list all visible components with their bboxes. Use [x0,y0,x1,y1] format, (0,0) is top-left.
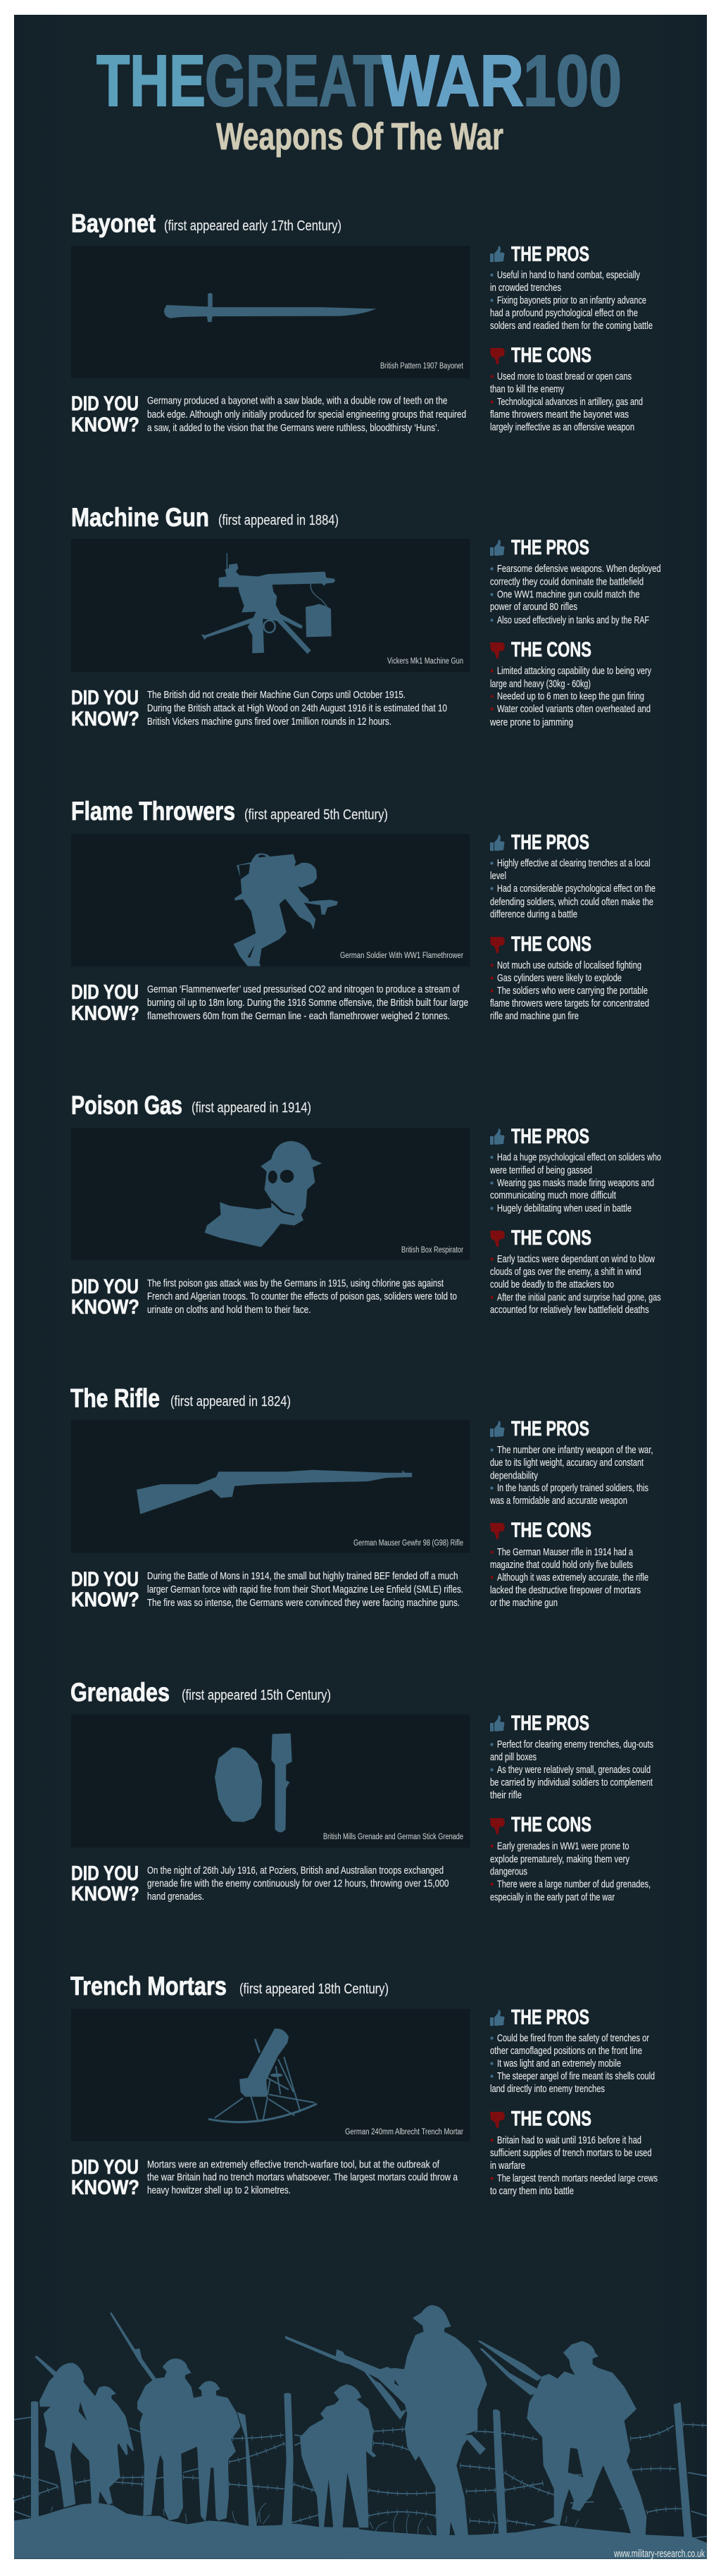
icon: flame thrower soldier silhouette [234,853,338,966]
did you know: machine gun [71,687,447,730]
pros: grenades: and pill boxes [490,1751,537,1763]
pros: bayonet: solders and readied them for the coming battle [490,320,653,332]
fence posts [31,2393,692,2538]
cons: grenades: THE CONS [511,1813,591,1836]
cons: flame throwers: The soldiers who were carrying the portable [497,985,648,997]
heading: grenades: (first appeared 15th Century) [182,1687,331,1703]
cons: the rifle: lacked the destructive firepower of mortars [490,1584,641,1596]
pros: grenades [490,1712,653,1801]
caption: German Mauser Gewhr 98 (G98) Rifle [353,1539,463,1548]
icon: trench mortar silhouette [208,2029,317,2122]
did you know: poison gas: French and Algerian troops. To counter the effects of poison gas, soliders were told to [147,1290,457,1302]
pros: machine gun: correctly they could dominate the battlefield [490,576,644,588]
pros: bayonet: Fixing bayonets prior to an infantry advance [497,294,646,306]
icon: rifle silhouette [137,1470,412,1514]
did you know: trench mortars: DID YOU [71,2156,139,2179]
heading: the rifle: (first appeared in 1824) [170,1393,291,1410]
cons: machine gun: Water cooled variants often overheated and [497,703,651,715]
panel: the rifle [70,1383,653,1612]
pros: machine gun: power of around 80 rifles [490,601,577,613]
cons: grenades [490,1813,651,1903]
cons: grenades: especially in the early part of the war [490,1891,615,1903]
panel: machine gun [71,503,661,730]
pros: bayonet: had a profound psychological effect on the [490,307,638,319]
title: THE [96,40,206,121]
cons: trench mortars [490,2108,658,2197]
heading: flame throwers: (first appeared 5th Century) [244,807,388,823]
heading: bayonet: Bayonet [71,209,156,238]
image panel: rifle [71,1420,470,1553]
heading: poison gas: Poison Gas [71,1091,182,1120]
heading: bayonet [71,209,341,238]
title: WAR [382,40,524,121]
pros: the rifle: The number one infantry weapon of the war, [497,1444,653,1456]
did you know: poison gas: KNOW? [71,1296,139,1319]
did you know: the rifle: During the Battle of Mons in 1914, the small but highly trained BEF fended off a much [147,1570,458,1582]
pros: grenades: be carried by individual soldiers to complement [490,1777,653,1788]
panel: flame throwers [71,797,656,1025]
pros: the rifle: was a formidable and accurate weapon [489,1495,627,1507]
pros: trench mortars: other camoflaged positions on the front line [490,2045,642,2057]
cons: flame throwers: Not much use outside of localised fighting [497,959,641,971]
pros: poison gas: Wearing gas masks made firing weapons and [497,1177,654,1189]
cons: grenades: There were a large number of dud grenades, [497,1878,651,1891]
caption: British Box Respirator [401,1246,463,1255]
cons: machine gun: Limited attacking capability due to being very [497,665,651,677]
soldiers [35,2305,646,2537]
did you know: the rifle [71,1568,463,1612]
heading: grenades: Grenades [70,1678,170,1707]
heading: machine gun: Machine Gun [71,503,209,532]
pros: flame throwers: difference during a battle [490,909,577,920]
pros: machine gun: One WW1 machine gun could match the [497,589,639,600]
caption: German Soldier With WW1 Flamethrower [340,952,463,960]
did you know: poison gas [71,1276,457,1319]
cons: machine gun [489,638,651,728]
pros: machine gun: Also used effectively in tanks and by the RAF [497,614,649,626]
pros: poison gas: THE PROS [511,1125,589,1148]
illustration: soldiers silhouette with barbed wire [14,2305,707,2559]
pros: flame throwers: defending soldiers, which could often make the [490,896,653,908]
cons: trench mortars: to carry them into battle [490,2185,574,2197]
heading: flame throwers: Flame Throwers [71,797,235,826]
did you know: grenades: DID YOU [71,1862,139,1885]
did you know: machine gun: KNOW? [71,708,139,730]
cons: the rifle: THE CONS [511,1519,591,1542]
pros: machine gun: THE PROS [511,536,589,559]
panel: bayonet [71,209,653,437]
did you know: machine gun: DID YOU [71,687,139,709]
cons: bayonet: Technological advances in artillery, gas and [497,396,643,408]
icon: grenades silhouette [215,1734,292,1832]
did you know: flame throwers: burning oil up to 18m long. During the 1916 Somme offensive, the British built four large [147,997,468,1009]
caption: British Mills Grenade and German Stick Grenade [323,1833,463,1841]
pros: grenades: THE PROS [511,1712,589,1735]
cons: poison gas: accounted for relatively few battlefield deaths [490,1304,649,1316]
pros: the rifle: In the hands of properly trained soldiers, this [497,1482,648,1494]
pros: trench mortars: The steeper angel of fire meant its shells could [497,2070,655,2082]
did you know: poison gas: urinate on cloths and hold them to their face. [147,1304,311,1316]
heading: machine gun [71,503,339,532]
did you know: trench mortars: Mortars were an extremely effective trench-warfare tool, but at the outbreak of [147,2158,440,2171]
cons: bayonet [490,344,643,433]
did you know: trench mortars [71,2156,458,2199]
did you know: flame throwers: KNOW? [71,1002,139,1025]
pros: flame throwers [490,831,656,920]
pros: poison gas [489,1125,661,1214]
did you know: bayonet: DID YOU [71,393,139,416]
did you know: poison gas: The first poison gas attack was by the Germans in 1915, using chlorine gas against [147,1278,444,1289]
did you know: grenades [71,1862,449,1905]
pros: trench mortars [490,2006,655,2095]
heading: bayonet: (first appeared early 17th Century) [164,218,341,234]
subtitle: Weapons Of The War [216,116,503,158]
caption: German 240mm Albrecht Trench Mortar [345,2128,463,2136]
cons: machine gun: were prone to jamming [489,716,573,728]
pros: flame throwers: level [490,870,506,882]
title: 100 [523,40,622,121]
cons: machine gun: Needed up to 6 men to keep the gun firing [497,690,644,702]
pros: trench mortars: Could be fired from the safety of trenches or [497,2032,649,2044]
cons: trench mortars: in warfare [490,2160,525,2172]
pros: poison gas: Had a huge psychological effect on soliders who [497,1151,661,1164]
cons: the rifle: magazine that could hold only five bullets [490,1559,633,1571]
caption: British Pattern 1907 Bayonet [380,362,464,371]
panel: grenades [70,1678,653,1905]
cons: poison gas: Early tactics were dependant on wind to blow [497,1253,655,1265]
barbed wire [14,2418,707,2538]
did you know: bayonet: KNOW? [71,414,139,437]
did you know: trench mortars: the war Britain had no trench mortars whatsoever. The largest mortars could throw a [147,2171,458,2184]
icon: gas mask silhouette [205,1141,322,1247]
did you know: trench mortars: KNOW? [71,2177,139,2199]
heading: poison gas [71,1091,311,1120]
did you know: flame throwers: flamethrowers 60m from the German line - each flamethrower weighed 2 tonnes. [147,1010,450,1022]
cons: trench mortars: Britain had to wait until 1916 before it had [497,2134,641,2146]
cons: machine gun: large and heavy (30kg - 60kg) [490,678,591,690]
cons: bayonet: flame throwers meant the bayonet was [490,409,629,421]
image panel: flame thrower [71,834,470,966]
did you know: the rifle: The fire was so intense, the Germans were convinced they were facing machine guns. [147,1597,460,1609]
cons: flame throwers: rifle and machine gun fire [490,1010,579,1022]
image panel: bayonet [71,246,470,378]
did you know: machine gun: The British did not create their Machine Gun Corps until October 1915. [147,689,406,701]
did you know: the rifle: DID YOU [71,1568,139,1591]
did you know: bayonet: a saw, it added to the vision that the Germans were ruthless, bloodthirsty ‘Huns’. [147,422,439,434]
pros: machine gun [490,536,661,626]
pros: the rifle: dependability [490,1469,538,1482]
cons: bayonet: Used more to toast bread or open cans [497,371,632,382]
icon: machine gun silhouette [201,553,335,654]
cons: poison gas: could be deadly to the attackers too [490,1278,614,1290]
cons: machine gun: THE CONS [511,638,591,661]
pros: poison gas: were terrified of being gassed [489,1164,592,1176]
pros: bayonet [490,242,653,332]
did you know: the rifle: larger German force with rapid fire from their Short Magazine Lee Enfield (SMLE) rifles. [147,1583,463,1595]
pros: grenades: Perfect for clearing enemy trenches, dug-outs [497,1738,653,1750]
cons: poison gas: THE CONS [511,1226,591,1250]
cons: flame throwers: THE CONS [511,933,591,956]
cons: trench mortars: THE CONS [511,2108,591,2131]
did you know: bayonet: Germany produced a bayonet with a saw blade, with a double row of teeth on the [147,395,448,407]
did you know: grenades: hand grenades. [147,1891,204,1903]
pros: the rifle: due to its light weight, accuracy and constant [490,1457,644,1469]
pros: flame throwers: Had a considerable psychological effect on the [497,883,656,895]
cons: grenades: dangerous [490,1866,527,1878]
cons: the rifle: The German Mauser rifle in 1914 had a [497,1546,633,1558]
ground [14,2503,707,2559]
did you know: grenades: grenade fire with the enemy continuously for over 12 hours, throwing over 15,000 [147,1878,449,1890]
pros: machine gun: Fearsome defensive weapons. When deployed [497,563,661,575]
image panel: poison gas [71,1128,470,1260]
heading: machine gun: (first appeared in 1884) [218,512,339,528]
heading: poison gas: (first appeared in 1914) [192,1100,311,1116]
pros: trench mortars: land directly into enemy trenches [490,2083,605,2095]
cons: flame throwers [490,933,649,1022]
cons: poison gas: clouds of gas over the enemy, a shift in wind [490,1266,641,1278]
panel: poison gas [71,1091,661,1319]
cons: the rifle: Although it was extremely accurate, the rifle [497,1572,648,1583]
cons: flame throwers: Gas cylinders were likely to explode [497,972,622,984]
cons: the rifle [490,1519,648,1609]
image panel: machine gun [71,539,470,672]
did you know: grenades: KNOW? [71,1883,139,1905]
heading: trench mortars [70,1972,389,2001]
pros: grenades: As they were relatively small, grenades could [497,1764,651,1776]
pros: trench mortars: THE PROS [511,2006,589,2029]
cons: grenades: explode prematurely, making them very [490,1853,629,1865]
did you know: poison gas: DID YOU [71,1276,139,1298]
title: GREAT [205,40,385,121]
cons: bayonet: largely ineffective as an offensive weapon [490,421,634,433]
did you know: bayonet [71,393,466,437]
did you know: machine gun: British Vickers machine guns fired over 1million rounds in 12 hours. [147,716,391,728]
pros: flame throwers: Highly effective at clearing trenches at a local [497,857,651,869]
icon: bayonet silhouette [164,293,376,322]
cons: bayonet: than to kill the enemy [490,383,564,395]
cons: the rifle: or the machine gun [490,1597,558,1609]
cons: poison gas: After the initial panic and surprise had gone, gas [497,1292,661,1303]
did you know: grenades: On the night of 26th July 1916, at Poziers, British and Australian troops exchanged [147,1865,444,1877]
cons: bayonet: THE CONS [511,344,591,367]
cons: flame throwers: flame throwers were targets for concentrated [490,997,649,1009]
cons: poison gas [490,1226,661,1316]
pros: bayonet: THE PROS [511,242,589,266]
heading: grenades [70,1678,331,1707]
pros: bayonet: Useful in hand to hand combat, especially [497,269,640,281]
did you know: bayonet: back edge. Although only initially produced for special engineering groups that required [147,409,466,421]
pros: flame throwers: THE PROS [511,831,589,854]
pros: poison gas: Hugely debilitating when used in battle [497,1202,632,1214]
pros: the rifle [489,1417,653,1507]
cons: grenades: Early grenades in WW1 were prone to [497,1840,629,1853]
pros: the rifle: THE PROS [511,1417,589,1441]
image panel: trench mortar [71,2009,470,2141]
heading: trench mortars: Trench Mortars [70,1972,227,2001]
heading: flame throwers [71,797,388,826]
did you know: trench mortars: heavy howitzer shell up to 2 kilometres. [147,2184,291,2196]
did you know: the rifle: KNOW? [71,1589,139,1612]
title [96,40,622,121]
pros: poison gas: communicating much more difficult [490,1189,617,1202]
pros: trench mortars: It was light and an extremely mobile [497,2058,621,2070]
did you know: flame throwers [71,981,468,1025]
heading: trench mortars: (first appeared 18th Century) [239,1981,389,1997]
pros: grenades: their rifle [490,1789,522,1801]
heading: the rifle: The Rifle [70,1383,160,1413]
did you know: flame throwers: DID YOU [71,981,139,1004]
heading: the rifle [70,1383,291,1413]
image panel: grenades [71,1715,470,1848]
pros: bayonet: in crowded trenches [490,282,561,294]
cons: trench mortars: sufficient supplies of trench mortars to be used [490,2147,652,2159]
caption: Vickers Mk1 Machine Gun [387,657,463,666]
did you know: machine gun: During the British attack at High Wood on 24th August 1916 it is estimated that 10 [147,702,447,714]
cons: trench mortars: The largest trench mortars needed large crews [497,2172,658,2184]
panel: trench mortars [70,1972,658,2199]
did you know: flame throwers: German ‘Flammenwerfer’ used pressurised CO2 and nitrogen to produce a stream of [147,983,460,995]
